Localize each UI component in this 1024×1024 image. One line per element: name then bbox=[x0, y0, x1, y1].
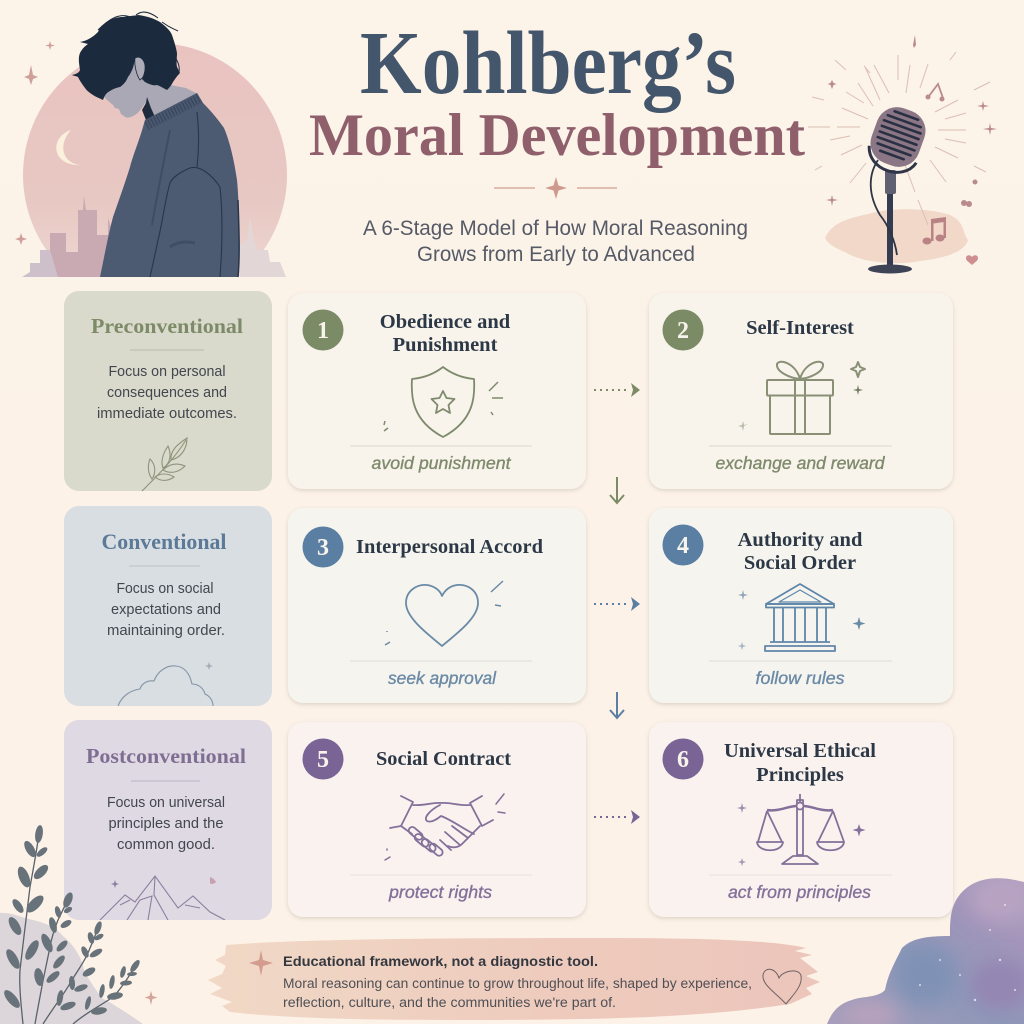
heading: Conventional bbox=[102, 529, 226, 554]
stage title: Punishment bbox=[393, 334, 498, 356]
icon: hand-drawn heart bbox=[763, 969, 801, 1004]
sweater bbox=[100, 93, 239, 277]
panel: Preconventional bbox=[64, 291, 272, 491]
description: consequences and bbox=[107, 385, 227, 401]
description bbox=[97, 364, 237, 422]
watercolor cloud: bottom right bbox=[827, 878, 1024, 1024]
description: principles and the bbox=[108, 816, 224, 832]
number badge: 1 bbox=[317, 318, 329, 344]
card: stage 4 bbox=[649, 508, 953, 703]
sweater collar bbox=[145, 93, 203, 131]
stage title: Principles bbox=[756, 764, 844, 786]
brush stroke background bbox=[208, 938, 820, 1020]
subtitle: A 6-Stage Model of How Moral Reasoning bbox=[363, 217, 748, 240]
caption: avoid punishment bbox=[372, 453, 512, 473]
card: stage 3 bbox=[288, 508, 586, 703]
title bbox=[309, 14, 805, 168]
arrow: 5 to 6 bbox=[594, 810, 640, 824]
watercolor blob: bottom left bbox=[0, 913, 143, 1024]
caption: act from principles bbox=[728, 882, 871, 902]
watercolor blob bbox=[825, 209, 968, 263]
number badge: 3 bbox=[317, 535, 329, 561]
icon: handshake bbox=[385, 794, 505, 860]
description: maintaining order. bbox=[107, 623, 225, 639]
card: stage 5 bbox=[288, 722, 586, 917]
stage title: Authority and bbox=[738, 529, 863, 551]
caption: protect rights bbox=[388, 882, 492, 902]
description: common good. bbox=[117, 837, 215, 853]
description: immediate outcomes. bbox=[97, 406, 237, 422]
sparkles bbox=[15, 41, 55, 245]
number badge bbox=[302, 526, 344, 568]
description: Focus on universal bbox=[107, 795, 225, 811]
panel: Conventional bbox=[64, 506, 272, 706]
caption: follow rules bbox=[756, 668, 845, 688]
number badge: 4 bbox=[677, 533, 689, 559]
description: Focus on personal bbox=[108, 364, 226, 380]
subtitle: Grows from Early to Advanced bbox=[417, 243, 695, 266]
note body: Moral reasoning can continue to grow throughout life, shaped by experience, bbox=[283, 976, 752, 991]
ear bbox=[135, 57, 145, 80]
stage title bbox=[724, 740, 876, 786]
stage title: Interpersonal Accord bbox=[356, 536, 544, 558]
illustration: microphone bbox=[808, 35, 997, 274]
illustration: person with moon and skyline bbox=[15, 12, 287, 307]
title line one: Kohlberg’s bbox=[360, 14, 736, 113]
illustration: leafy branches bbox=[1, 825, 158, 1024]
card: stage 1 bbox=[288, 293, 586, 489]
icon: mountains bbox=[100, 876, 225, 920]
pink moon circle bbox=[23, 44, 287, 277]
icon: cloud bbox=[118, 662, 213, 706]
subtitle bbox=[363, 217, 748, 266]
description: expectations and bbox=[111, 602, 221, 618]
footer note banner bbox=[208, 938, 820, 1020]
mic head bbox=[862, 101, 932, 179]
stage title bbox=[380, 311, 511, 356]
number badge bbox=[302, 738, 344, 780]
stage title: Social Contract bbox=[376, 748, 511, 770]
crescent moon bbox=[56, 130, 85, 165]
icon: sparkle bbox=[249, 950, 273, 976]
note body bbox=[283, 976, 752, 1010]
jaw shadow bbox=[142, 97, 155, 120]
title ornament bbox=[494, 177, 617, 199]
heading: Preconventional bbox=[91, 314, 243, 338]
mic stand and cable bbox=[868, 160, 912, 274]
musical notes and sparkles bbox=[826, 35, 997, 265]
icon: heart bbox=[385, 581, 503, 646]
number badge bbox=[662, 310, 704, 350]
stage title: Universal Ethical bbox=[724, 740, 876, 762]
sweater shading bbox=[150, 112, 239, 277]
card: stage 2 bbox=[649, 293, 953, 489]
stage title bbox=[738, 529, 863, 574]
stage title: Social Order bbox=[744, 552, 856, 574]
number badge: 6 bbox=[677, 747, 689, 773]
caption: seek approval bbox=[388, 668, 497, 688]
number badge bbox=[662, 738, 704, 780]
description bbox=[107, 581, 225, 639]
city skyline bbox=[22, 196, 286, 277]
arrow: 3 to 4 bbox=[594, 597, 640, 611]
arrow: 1 to 2 bbox=[594, 383, 640, 397]
description bbox=[107, 795, 225, 853]
number badge bbox=[662, 524, 704, 566]
stage title: Self-Interest bbox=[746, 317, 854, 339]
arrow: 2 to 3 bbox=[610, 477, 624, 503]
title line two: Moral Development bbox=[309, 102, 805, 168]
face and neck bbox=[100, 55, 198, 118]
icon: temple bbox=[738, 584, 866, 651]
icon: sprig bbox=[142, 438, 187, 491]
arrow: 4 to 5 bbox=[610, 692, 624, 718]
caption: exchange and reward bbox=[716, 453, 886, 473]
icon: scales bbox=[737, 794, 866, 866]
note heading: Educational framework, not a diagnostic tool. bbox=[283, 953, 598, 969]
hair bbox=[72, 15, 180, 100]
icon: gift bbox=[738, 362, 865, 434]
note body: reflection, culture, and the communities we're part of. bbox=[283, 995, 616, 1010]
number badge: 5 bbox=[317, 747, 329, 773]
heading: Postconventional bbox=[86, 744, 246, 768]
icon: shield bbox=[384, 367, 503, 437]
number badge: 2 bbox=[677, 318, 689, 344]
sunburst rays bbox=[808, 52, 990, 225]
number badge bbox=[302, 310, 344, 350]
stage title: Obedience and bbox=[380, 311, 511, 333]
hair wisps bbox=[98, 12, 179, 72]
description: Focus on social bbox=[116, 581, 214, 597]
panel: Postconventional bbox=[64, 720, 272, 920]
card: stage 6 bbox=[649, 722, 953, 917]
